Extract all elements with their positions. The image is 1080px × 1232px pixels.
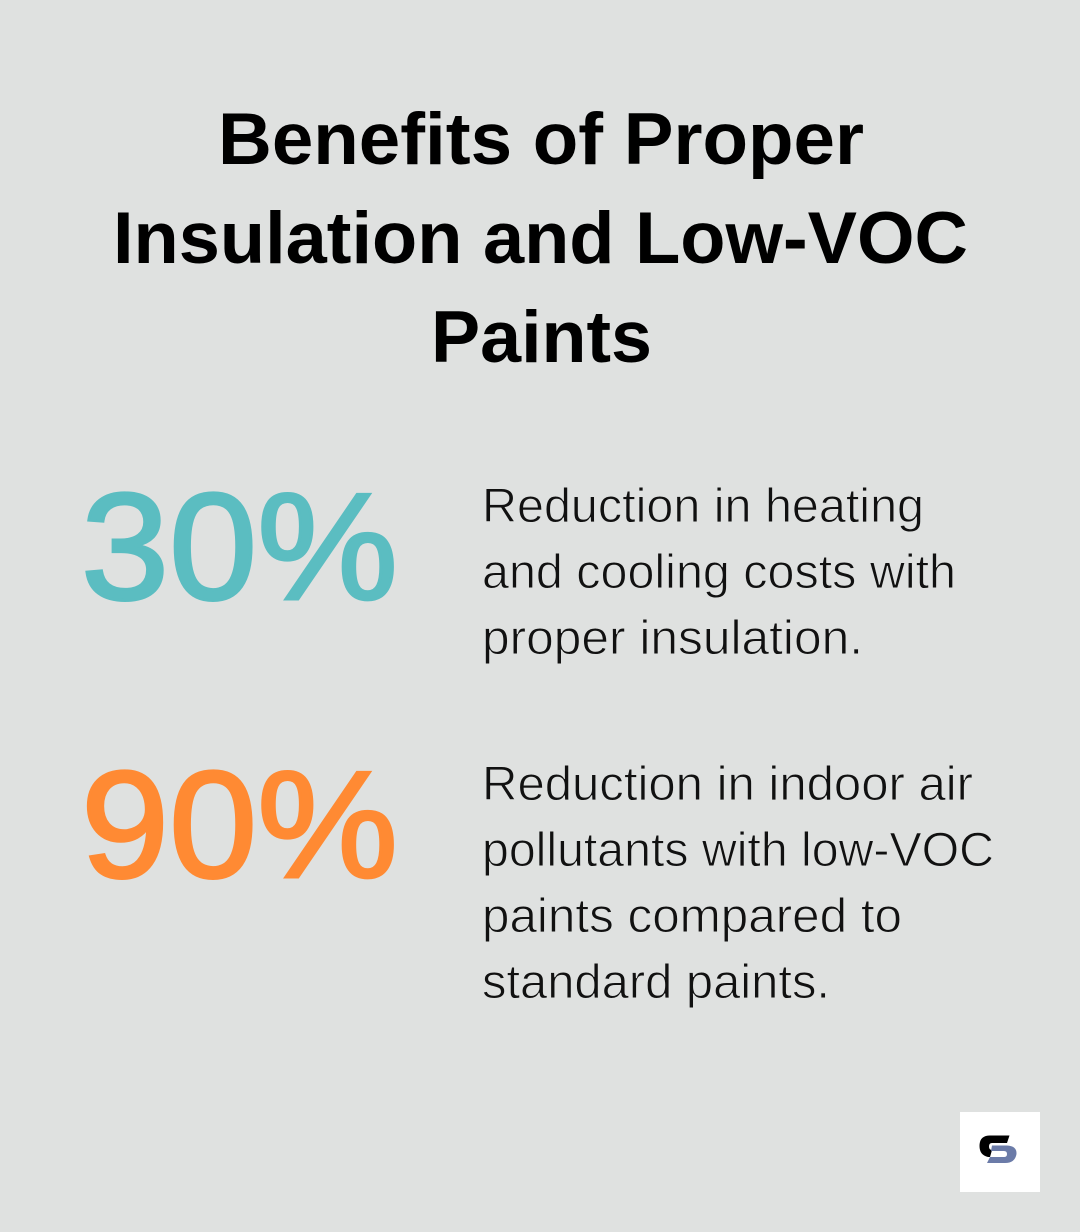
- title: Benefits of Proper: [218, 99, 864, 180]
- title: Paints: [431, 297, 652, 378]
- logo badge: [960, 1112, 1040, 1192]
- stat: 90%: 90%: [81, 740, 398, 910]
- text: insulation benefit: [482, 480, 956, 665]
- title: Insulation and Low-VOC: [113, 198, 968, 279]
- text: low-VOC benefit: standard paints.: [482, 956, 830, 1009]
- text: low-VOC benefit: [482, 758, 994, 1009]
- text: low-VOC benefit: pollutants with low-VOC: [482, 824, 994, 877]
- text: low-VOC benefit: Reduction in indoor air: [482, 758, 973, 811]
- title: [113, 99, 968, 378]
- stat: 30%: 30%: [81, 462, 398, 632]
- text: insulation benefit: proper insulation.: [482, 612, 863, 665]
- text: low-VOC benefit: paints compared to: [482, 890, 902, 943]
- text: insulation benefit: Reduction in heating: [482, 480, 924, 533]
- text: insulation benefit: and cooling costs with: [482, 546, 956, 599]
